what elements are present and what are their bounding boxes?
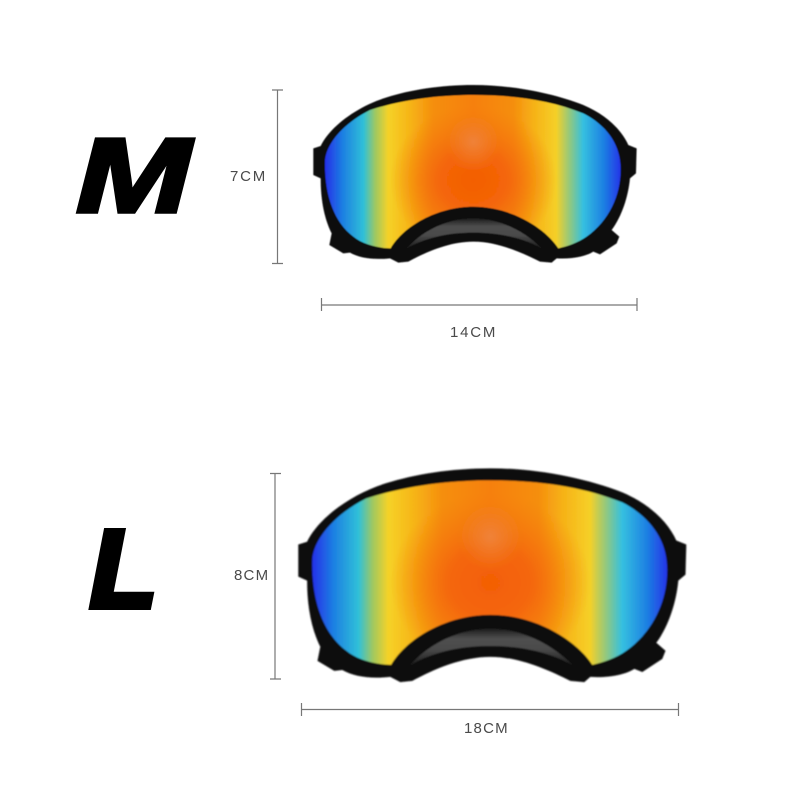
goggles: size L: [298, 468, 686, 682]
goggles: size M: [313, 85, 637, 263]
size label: L: L: [90, 508, 157, 631]
width dimension: 14CM: 14CM: [450, 324, 497, 341]
nose padding: [410, 629, 572, 665]
height dimension: 8CM: [234, 474, 281, 679]
width dimension: 18CM: [302, 703, 678, 737]
width dimension: 14CM: [322, 298, 637, 341]
size label: M: M: [76, 117, 194, 235]
goggle frame: [298, 468, 686, 682]
height dimension: 8CM: 8CM: [234, 567, 269, 584]
goggle frame: [313, 85, 637, 263]
mirrored lens: [325, 95, 621, 248]
nose padding: [407, 218, 542, 248]
height dimension: 7CM: [230, 90, 283, 264]
height dimension: 7CM: 7CM: [230, 168, 267, 185]
mirrored lens: [312, 480, 667, 665]
width dimension: 18CM: 18CM: [464, 720, 509, 737]
